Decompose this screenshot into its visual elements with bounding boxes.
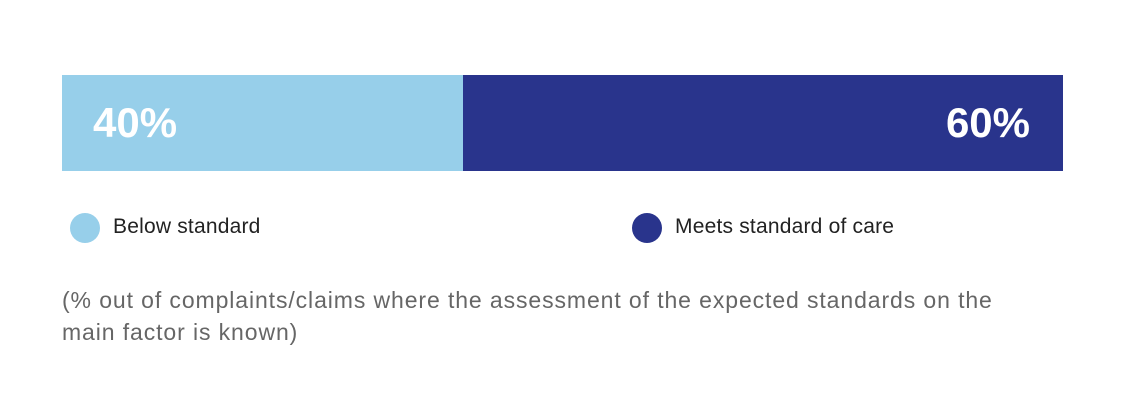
legend: meets standard of care: Meets standard of care — [675, 215, 894, 238]
legend: below standard: Below standard — [113, 215, 261, 238]
bar chart — [62, 75, 1063, 171]
bar segment: meets standard 60% — [463, 75, 1063, 171]
footnote: main factor is known) — [62, 319, 298, 345]
label 40%: 40% — [93, 99, 177, 146]
footnote: (% out of complaints/claims where the assessment of the expected standards on the — [62, 287, 993, 313]
bar segment: below standard 40% — [62, 75, 463, 171]
legend: meets standard of care — [632, 213, 894, 243]
label 60%: 60% — [946, 99, 1030, 146]
legend: below standard — [70, 213, 261, 243]
footnote — [62, 287, 993, 345]
